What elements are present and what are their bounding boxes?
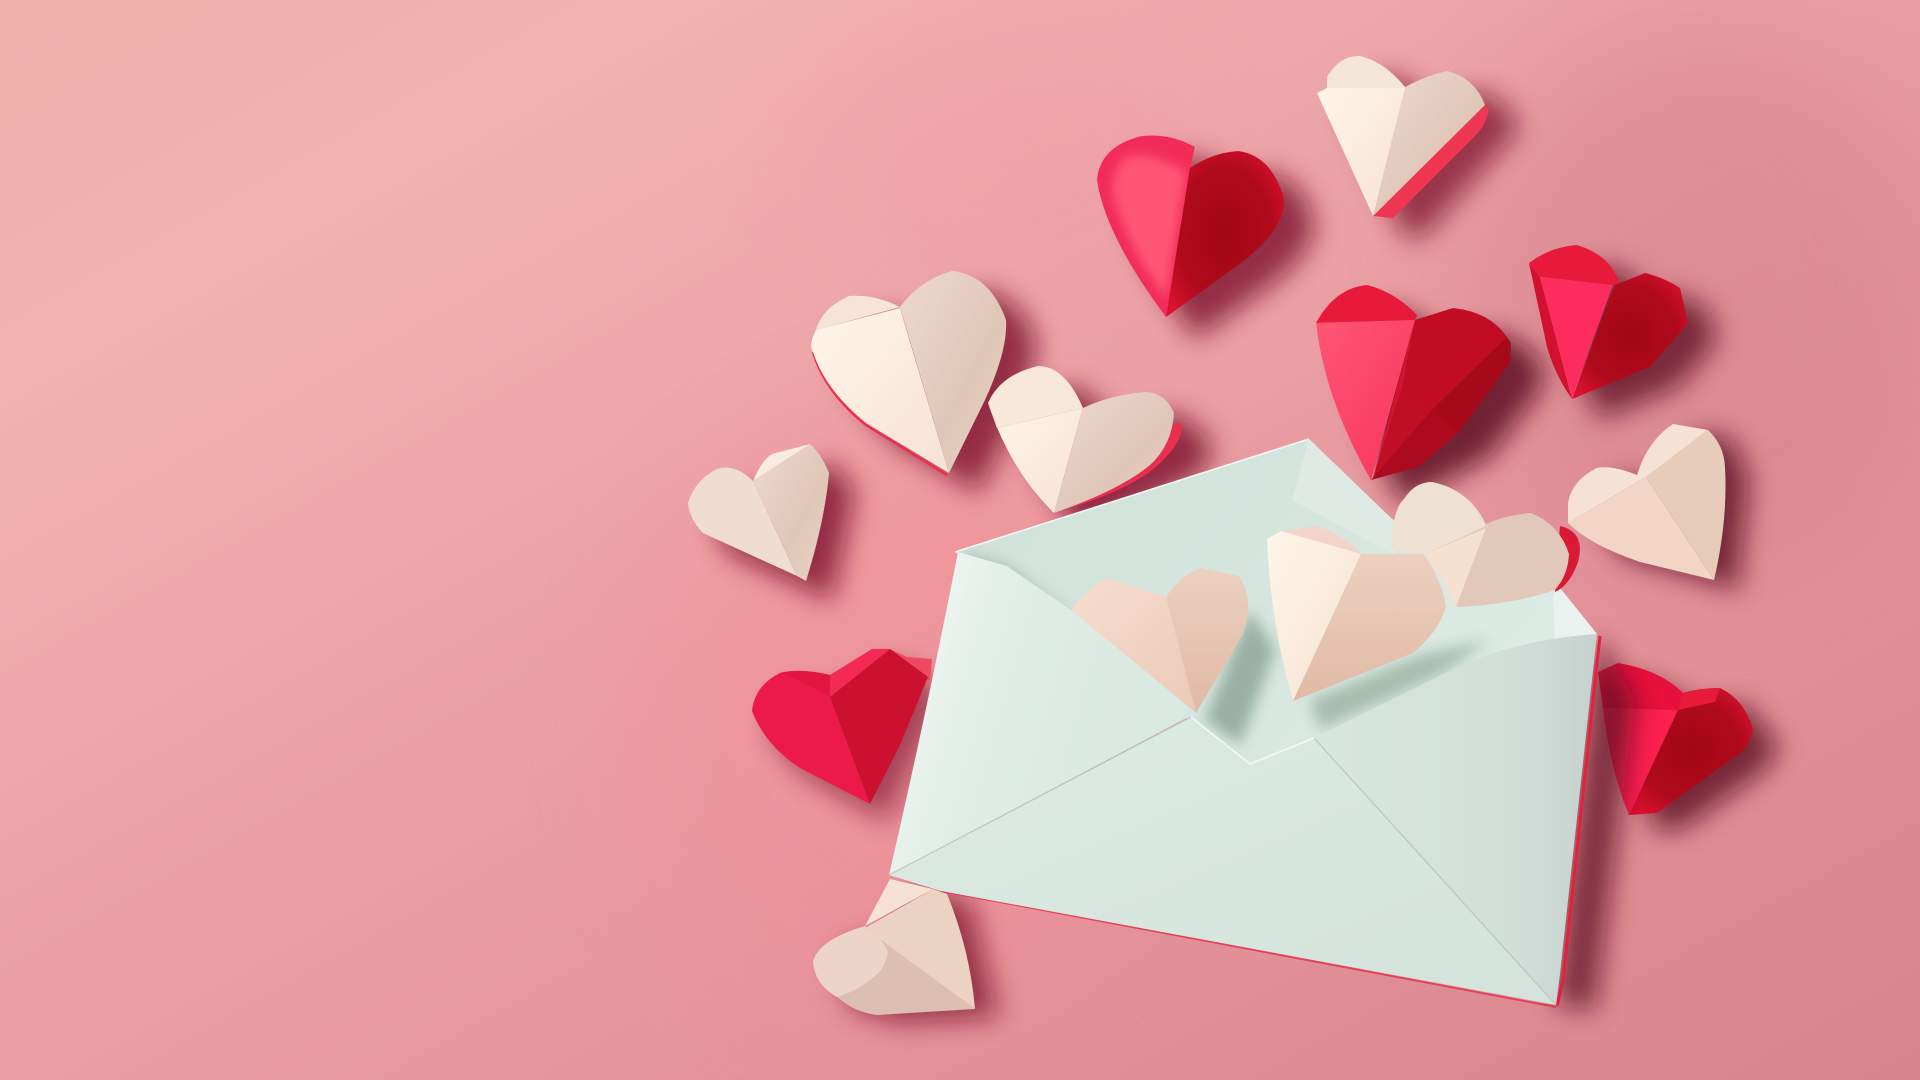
- envelope bottom red rim: [941, 891, 1556, 1007]
- heart: red top right: [1529, 245, 1716, 419]
- heart: cream bottom: [813, 879, 999, 1023]
- envelope right flap: [1314, 634, 1597, 1005]
- envelope back flap: [955, 439, 1597, 764]
- heart: red centre: [1316, 285, 1543, 504]
- heart: cream in envelope: [1071, 568, 1248, 713]
- envelope fold highlight: [1292, 439, 1395, 555]
- envelope inner shadows: [958, 552, 1490, 745]
- heart: cream right: [1568, 424, 1749, 590]
- heart: cream in envelope, front: [1267, 526, 1446, 701]
- heart: red top centre: [1097, 135, 1314, 339]
- envelope bottom flap: [889, 717, 1556, 1005]
- envelope edge highlights: [955, 439, 1314, 764]
- envelope right red rim: [1557, 636, 1600, 1006]
- heart: red left: [752, 649, 946, 822]
- envelope: [889, 439, 1635, 1010]
- envelope right shadow: [1556, 634, 1635, 1010]
- envelope left flap: [889, 552, 1196, 875]
- heart: small cream left: [688, 444, 855, 601]
- envelope corner highlight: [1553, 588, 1597, 640]
- envelope crease lines: [889, 717, 1556, 1005]
- heart: cream middle: [988, 366, 1211, 535]
- heart: cream top right: [1317, 56, 1519, 238]
- heart: cream rear: [1392, 482, 1580, 607]
- heart: red right: [1598, 663, 1779, 831]
- heart: large cream left: [811, 271, 1036, 493]
